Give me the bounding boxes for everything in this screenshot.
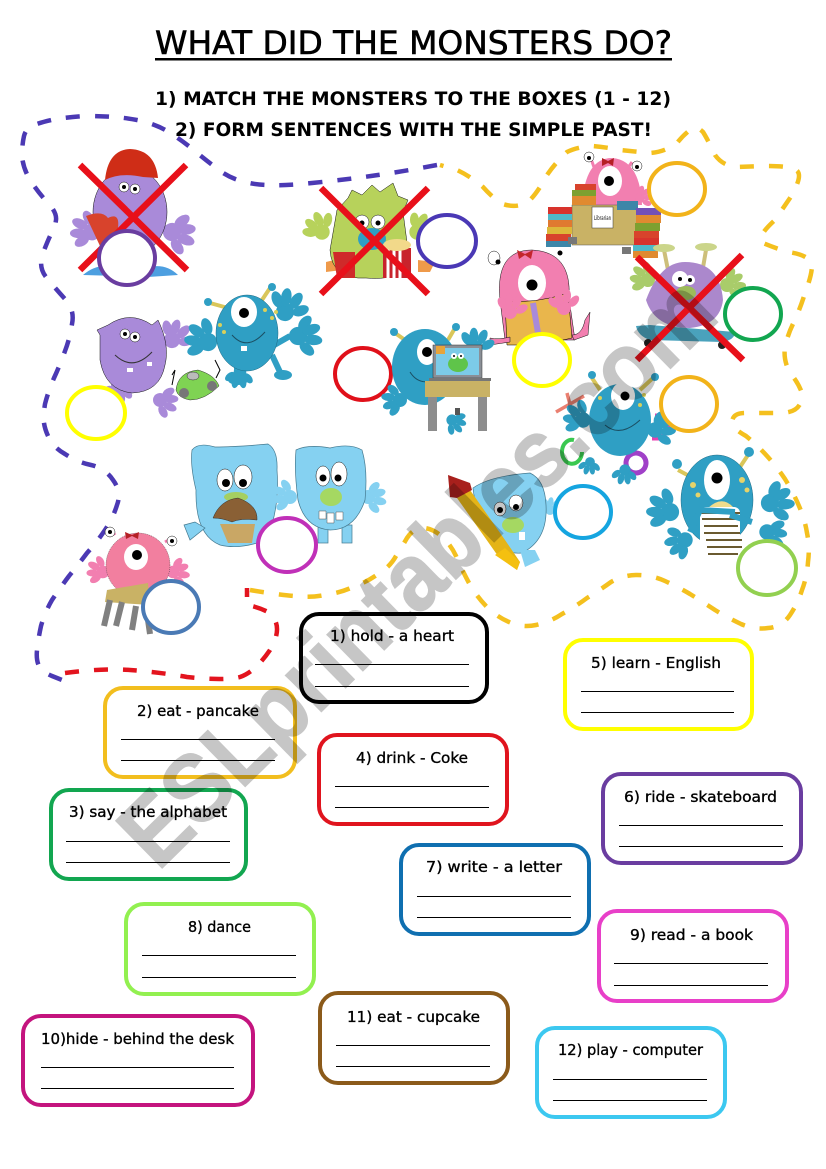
instruction 1: 1) MATCH THE MONSTERS TO THE BOXES (1 - 12) (155, 88, 671, 110)
box 5: learn english: 5) learn - English (591, 654, 721, 672)
box 12: play computer (537, 1028, 725, 1117)
monster: blue with laptop at desk (378, 323, 499, 440)
monster: pink librarian with books: Librarian (594, 214, 611, 222)
monster: pink librarian with books (546, 152, 661, 258)
answer circle (258, 518, 316, 572)
answer circle (143, 581, 199, 633)
box 10: hide behind the desk (23, 1016, 253, 1105)
box 1: hold a heart: 1) hold - a heart (330, 627, 454, 645)
answer circle (661, 377, 717, 431)
box 5: learn english (565, 640, 752, 729)
dashed path: gold (250, 128, 812, 628)
monster: blue dancing (178, 282, 326, 389)
monster: blue holding cupcake (184, 444, 278, 547)
title: WHAT DID THE MONSTERS DO? (155, 24, 672, 62)
box 11: eat cupcake (320, 993, 508, 1083)
instruction 2: 2) FORM SENTENCES WITH THE SIMPLE PAST! (175, 119, 652, 141)
answer circle (67, 387, 125, 439)
cross over skateboard monster (637, 255, 743, 360)
answer circle (335, 348, 391, 400)
box 1: hold a heart (301, 614, 487, 702)
monster: blue with pencil (448, 473, 567, 570)
box 2: eat pancake (105, 688, 295, 777)
cross over purple monster (80, 165, 187, 270)
box 3: say the alphabet (51, 790, 246, 879)
monster: blue with alphabet letters (556, 371, 681, 485)
monster: purple on skateboard (625, 243, 751, 349)
box 11: eat cupcake: 11) eat - cupcake (347, 1008, 480, 1026)
monster: blue with green nose (270, 446, 388, 543)
box 10: hide behind the desk: 10)hide - behind the desk (41, 1030, 234, 1048)
monster: purple with cap and heart (66, 149, 198, 277)
answer circle (725, 288, 781, 340)
box 2: eat pancake: 2) eat - pancake (137, 702, 259, 720)
box 4: drink coke (319, 735, 507, 824)
box 7: write a letter (401, 845, 589, 934)
box 7: write a letter: 7) write - a letter (426, 858, 563, 876)
box 6: ride skateboard (603, 774, 801, 863)
cross over green monster (321, 188, 428, 294)
answer circle (99, 231, 155, 285)
box 4: drink coke: 4) drink - Coke (356, 749, 468, 767)
answer circle (514, 334, 570, 386)
answer circle (555, 486, 611, 538)
monster: green with popcorn (295, 183, 446, 278)
box 8: dance: 8) dance (188, 918, 251, 936)
box 12: play computer: 12) play - computer (558, 1041, 704, 1059)
box 6: ride skateboard: 6) ride - skateboard (624, 788, 777, 806)
monster: purple with radio (97, 312, 220, 422)
answer circle (418, 215, 476, 267)
box 8: dance (126, 904, 314, 994)
box 3: say the alphabet: 3) say - the alphabet (69, 803, 227, 821)
dashed path: red (65, 588, 277, 679)
watermark: ESLprintables.com (98, 257, 736, 887)
monster: pink hiding at desk (84, 527, 193, 634)
box 9: read a book (599, 911, 787, 1001)
monster: pink reading a book (488, 248, 590, 345)
dashed path: purple (22, 116, 437, 680)
monster: blue with pancakes (641, 447, 801, 566)
box 9: read a book: 9) read - a book (630, 926, 753, 944)
answer circle (738, 541, 796, 595)
answer circle (649, 163, 705, 215)
